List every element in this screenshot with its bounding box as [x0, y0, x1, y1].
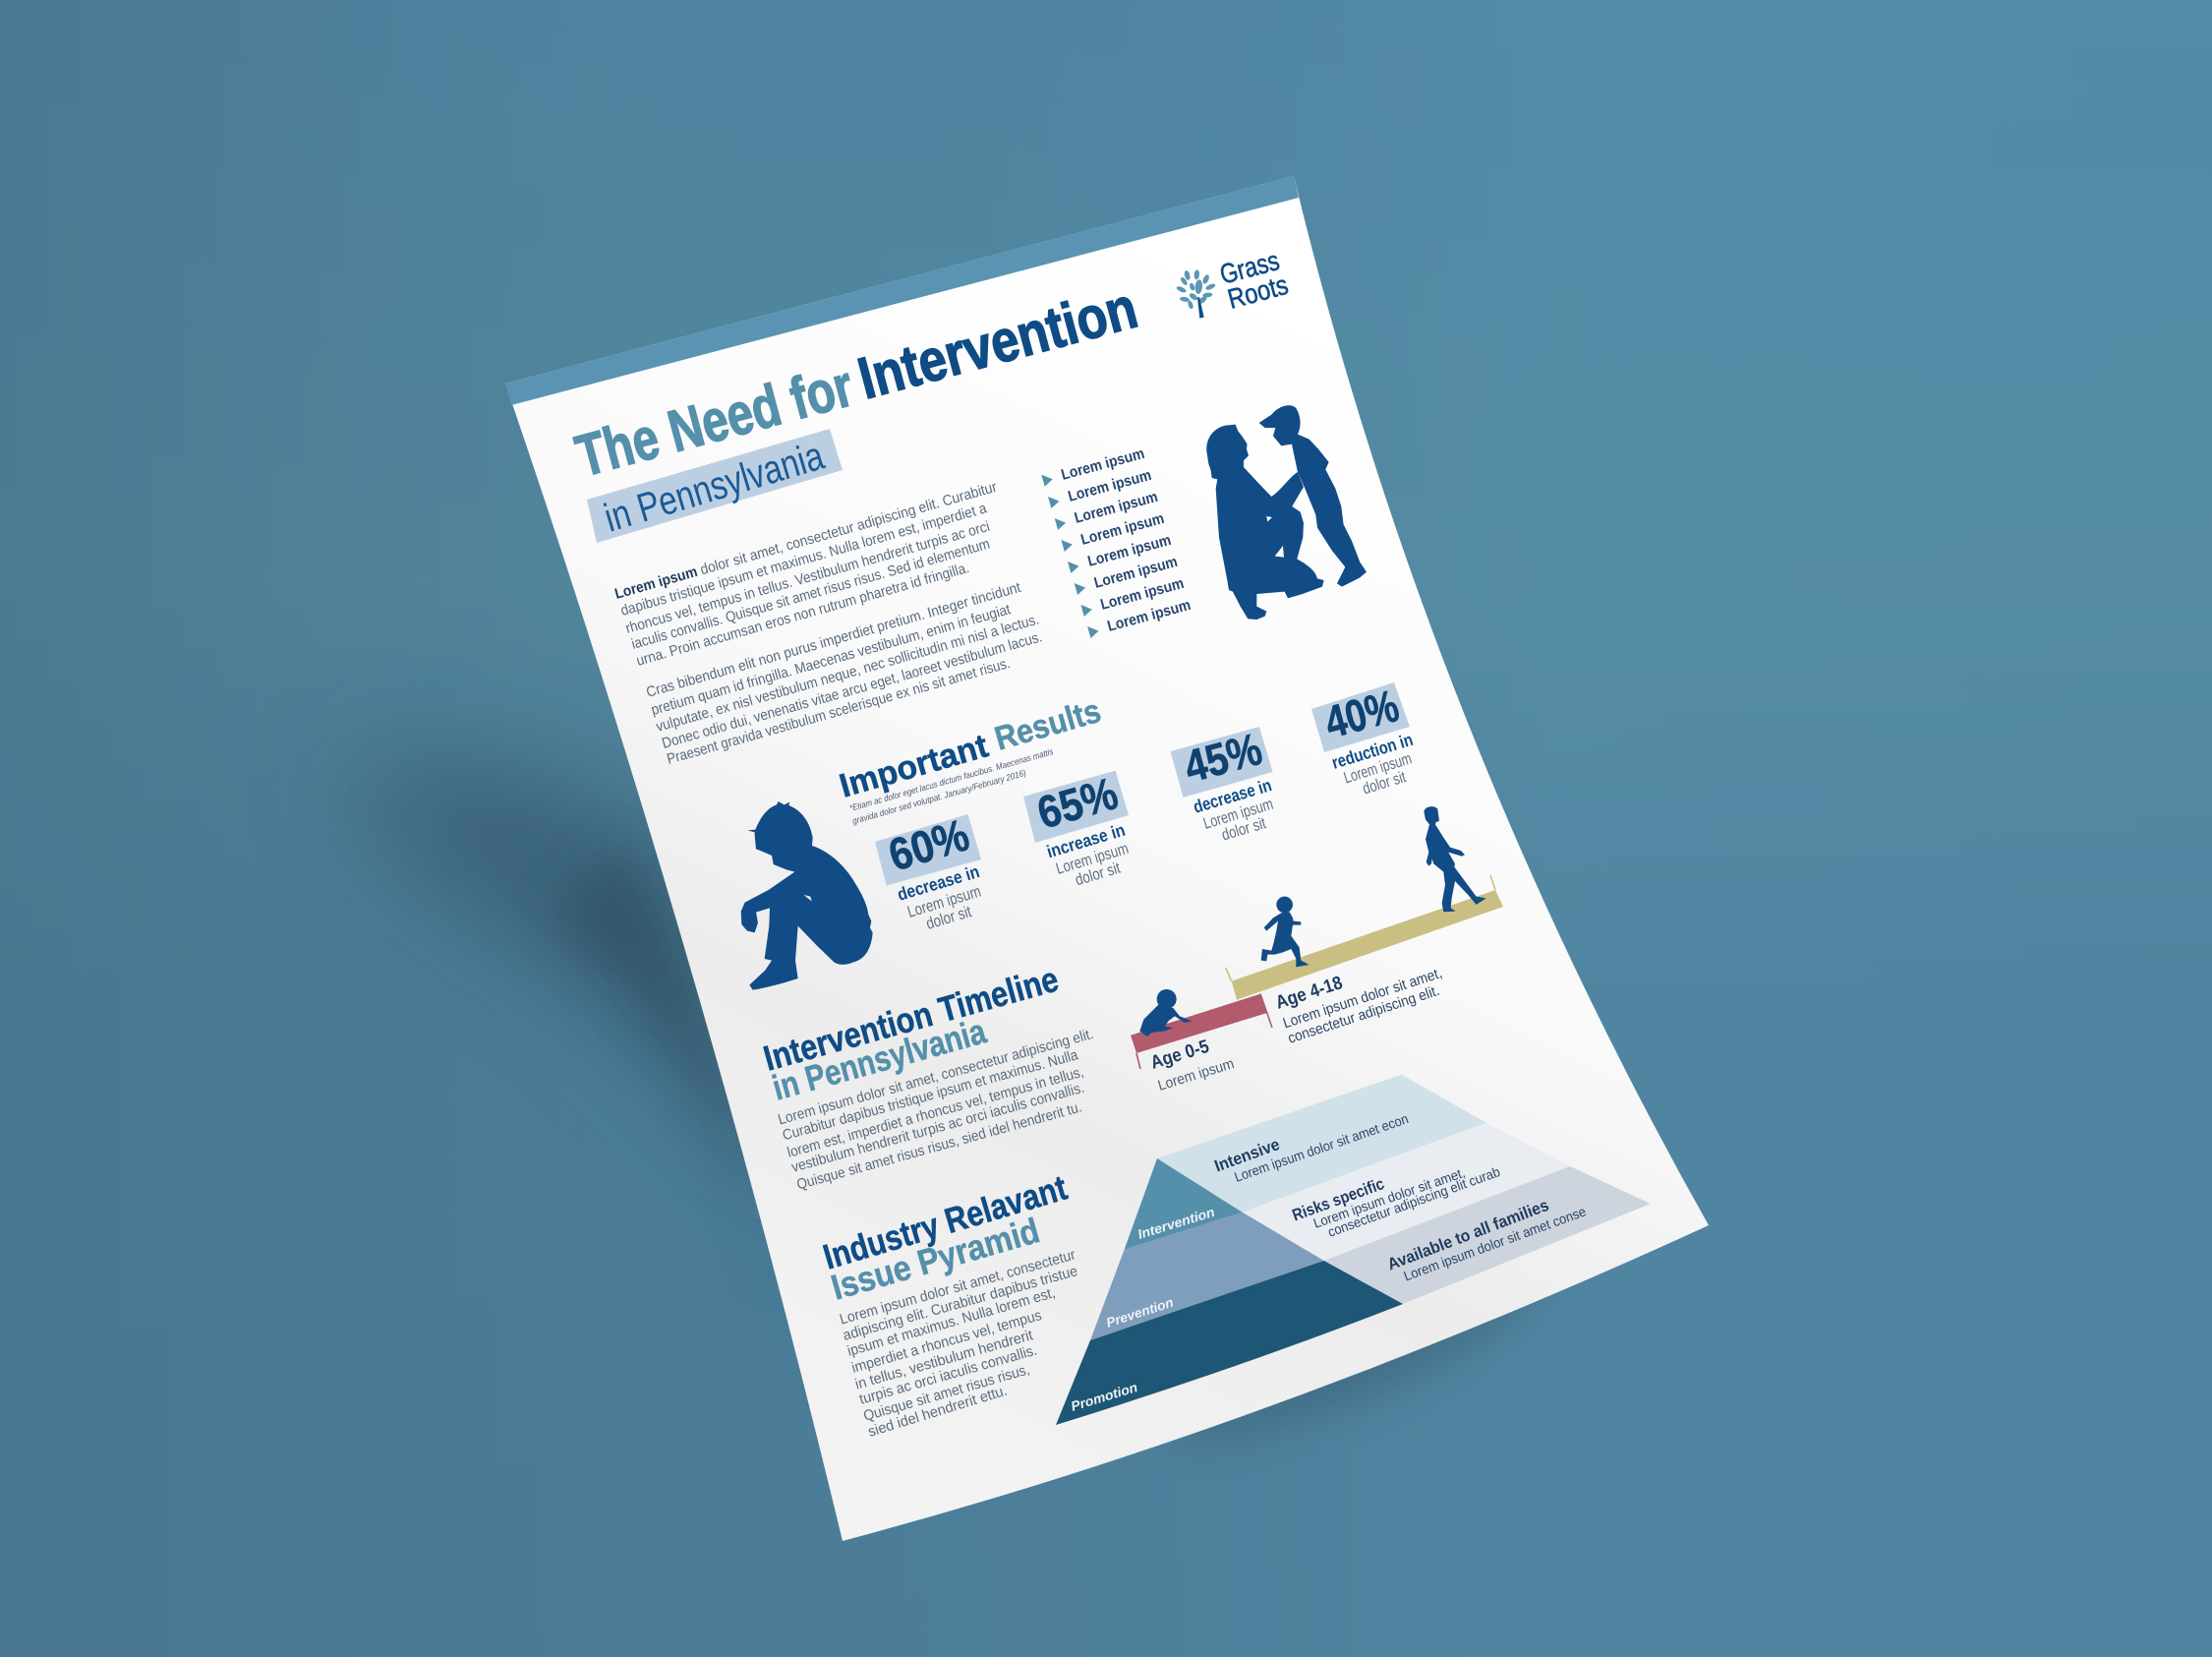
timeline body text: Curabitur dapibus tristique ipsum et maximus. Nulla: [781, 1046, 1080, 1144]
icon: baby crawling: [1139, 989, 1193, 1036]
tier: promotion: [1056, 1261, 1403, 1425]
bar: age 0-5: [1131, 994, 1272, 1069]
label: age 0-5: Lorem ipsum: [1156, 1055, 1236, 1095]
chart: issue pyramid: [1056, 1075, 1651, 1425]
bullet list: Lorem ipsum: [1073, 489, 1160, 527]
label: age 0-5: Age 0-5: [1148, 1036, 1212, 1074]
bullet list: Lorem ipsum: [1086, 532, 1173, 570]
stat: 40% reduction: reduction in: [1329, 730, 1415, 773]
intro paragraph 1: Lorem ipsum dolor sit amet, consectetur adipiscing elit. Curabitur: [612, 479, 999, 603]
intro paragraph 2: Cras bibendum elit non purus imperdiet pretium. Integer tincidunt: [644, 579, 1023, 701]
bullet list: Lorem ipsum: [1079, 510, 1166, 549]
stat: 65% increase: increase in: [1044, 820, 1128, 861]
pyramid body text: adipiscing elit. Curabitur dapibus tristue: [842, 1263, 1079, 1344]
stat: 65% increase: 65%: [1031, 767, 1124, 839]
stat: 60% decrease: [875, 808, 983, 933]
title: [569, 274, 1143, 490]
heading: Intervention Timeline: in Pennsylvania: [768, 1010, 991, 1108]
timeline body text: Lorem ipsum dolor sit amet, consectetur adipiscing elit.: [777, 1026, 1095, 1128]
timeline body text: vestibulum hendrerit turpis ac orci iaculis convallis.: [789, 1080, 1086, 1176]
bullet list: [1041, 445, 1193, 638]
stat: 60% decrease: Lorem ipsum: [905, 883, 983, 921]
paper sheet: [505, 176, 1709, 1541]
band: risks specific: Risks specific: [1290, 1174, 1386, 1224]
bullet list: Lorem ipsum: [1106, 597, 1193, 635]
intro paragraph 2: vulputate, ex nisl vestibulum neque, nec sollicitudin mi nisl a lectus.: [654, 611, 1041, 736]
stat: 65% increase: Lorem ipsum: [1054, 840, 1131, 878]
pyramid body text: [838, 1246, 1079, 1441]
bullet list: Lorem ipsum: [1060, 445, 1146, 484]
timeline body text: lorem est, imperdiet a rhoncus vel, tempus in tellus,: [786, 1064, 1085, 1161]
stat: 45% decrease: 45%: [1179, 723, 1267, 793]
heading: Intervention Timeline: [759, 959, 1063, 1108]
heading: Industry Relavant Issue Pyramid: Issue Pyramid: [827, 1210, 1044, 1308]
icon: mother and child silhouette: [1206, 405, 1367, 620]
stat: 40% reduction: [1311, 680, 1415, 799]
band: available to all families: Lorem ipsum dolor sit amet conse: [1402, 1203, 1588, 1284]
bullet list: Lorem ipsum: [1092, 554, 1180, 592]
bullet list: Lorem ipsum: [1067, 467, 1153, 505]
intro paragraph 2: [644, 579, 1044, 768]
top colour strip: [505, 176, 1299, 405]
bar: age 4-18: [1226, 875, 1503, 1000]
pyramid body text: turpis ac orci iaculis convallis.: [857, 1342, 1039, 1408]
label: age 0-5: [1148, 1036, 1236, 1095]
logo: Grass Roots: Grass: [1217, 245, 1282, 290]
intro paragraph 1: dapibus tristique ipsum et maximus. Nulla lorem est, imperdiet a: [618, 500, 989, 620]
intro paragraph 2: Praesent gravida vestibulum scelerisque ex nis sit amet risus.: [665, 655, 1012, 768]
label: age 4-18: Age 4-18: [1273, 973, 1345, 1014]
footnote: *Etiam ac dolor eget lacus dictum faucibus. Maecenas mattis: [848, 746, 1055, 813]
stat: 40% reduction: dolor sit: [1361, 768, 1409, 799]
stat: 45% decrease: decrease in: [1191, 775, 1274, 817]
paper shadow: [334, 762, 1573, 1441]
stat: 45% decrease: dolor sit: [1220, 814, 1268, 845]
icon: sitting child silhouette: [741, 801, 873, 990]
band: available to all families: [1324, 1166, 1651, 1304]
stat: 65% increase: [1023, 767, 1131, 889]
timeline body text: Quisque sit amet risus risus, sied idel hendrerit tu.: [795, 1098, 1083, 1193]
chart: age timeline bars: [1131, 806, 1503, 1069]
stat: 60% decrease: 60%: [883, 808, 974, 881]
heading: Intervention Timeline: Intervention Timeline: [759, 959, 1063, 1079]
icon: man walking: [1424, 806, 1486, 912]
intro paragraph 1: rhoncus vel, tempus in tellus. Vestibulum hendrerit turpis ac orci: [623, 518, 992, 637]
timeline body text: [777, 1026, 1095, 1193]
heading: Important Results: Important: [836, 727, 992, 805]
band: risks specific: [1243, 1123, 1570, 1261]
logo: Grass Roots: [1176, 245, 1291, 319]
heading: Industry Relavant Issue Pyramid: Industry Relavant: [819, 1167, 1072, 1277]
stat: 45% decrease: [1170, 723, 1275, 845]
label: age 4-18: Lorem ipsum dolor sit amet,: [1281, 965, 1444, 1032]
icon: tree: [1176, 269, 1216, 319]
band: intensive: [1157, 1075, 1486, 1213]
band: risks specific: Lorem ipsum dolor sit amet,: [1311, 1164, 1467, 1231]
logo: Grass Roots: Roots: [1225, 269, 1291, 315]
pyramid body text: sied idel hendrerit ettu.: [866, 1383, 1010, 1441]
title: The Need for: [569, 352, 860, 490]
intro paragraph 2: pretium quam id fringilla. Maecenas vestibulum, enim in feugiat: [649, 601, 1013, 719]
pyramid body text: ipsum et maximus. Nulla lorem est,: [845, 1284, 1057, 1360]
heading: Important Results: Results: [991, 692, 1105, 758]
heading: Important Results: [836, 692, 1105, 805]
stat: 60% decrease: decrease in: [895, 861, 982, 905]
pyramid body text: Lorem ipsum dolor sit amet, consectetur: [838, 1246, 1077, 1329]
pyramid body text: imperdiet a rhoncus vel, tempus: [849, 1307, 1044, 1377]
stat: 60% decrease: dolor sit: [924, 903, 974, 933]
label: age 4-18: consectetur adipiscing elit.: [1286, 982, 1441, 1047]
intro paragraph 1: iaculis convallis. Quisque sit amet risus risus. Sed id elementum: [629, 536, 992, 653]
tier: prevention: Prevention: [1104, 1295, 1175, 1331]
icon: child running: [1261, 897, 1310, 967]
intro paragraph 2: Donec odio dui, venenatis vitae arcu eget, laoreet vestibulum lacus.: [660, 628, 1044, 752]
title: Intervention: [851, 274, 1143, 412]
band: intensive: Intensive: [1212, 1135, 1282, 1175]
stat: 40% reduction: Lorem ipsum: [1342, 749, 1414, 787]
intro paragraph 1: urna. Proin accumsan eros non rutrum pharetra id fringilla.: [634, 560, 971, 670]
stat: 40% reduction: 40%: [1319, 680, 1404, 748]
tier: prevention: [1090, 1213, 1324, 1340]
band: available to all families: Available to all families: [1385, 1196, 1551, 1273]
band: risks specific: consectetur adipiscing elit curab: [1325, 1163, 1502, 1240]
stat: 65% increase: dolor sit: [1074, 859, 1123, 889]
band: intensive: Lorem ipsum dolor sit amet econ: [1232, 1110, 1410, 1185]
tier: promotion: Promotion: [1069, 1380, 1139, 1414]
footnote: gravida dolor sed volutpat. January/February 2016): [851, 768, 1027, 826]
intro paragraph 1: [612, 479, 999, 670]
tier: intervention: [1125, 1158, 1243, 1250]
stat: 45% decrease: Lorem ipsum: [1201, 796, 1275, 833]
subtitle: in Pennsylvania: in Pennsylvania: [599, 433, 829, 541]
pyramid body text: in tellus, vestibulum hendrerit: [853, 1327, 1035, 1393]
tier: intervention: Intervention: [1135, 1205, 1216, 1242]
bullet list: Lorem ipsum: [1099, 575, 1186, 614]
pyramid body text: Quisque sit amet risus risus,: [861, 1361, 1031, 1425]
